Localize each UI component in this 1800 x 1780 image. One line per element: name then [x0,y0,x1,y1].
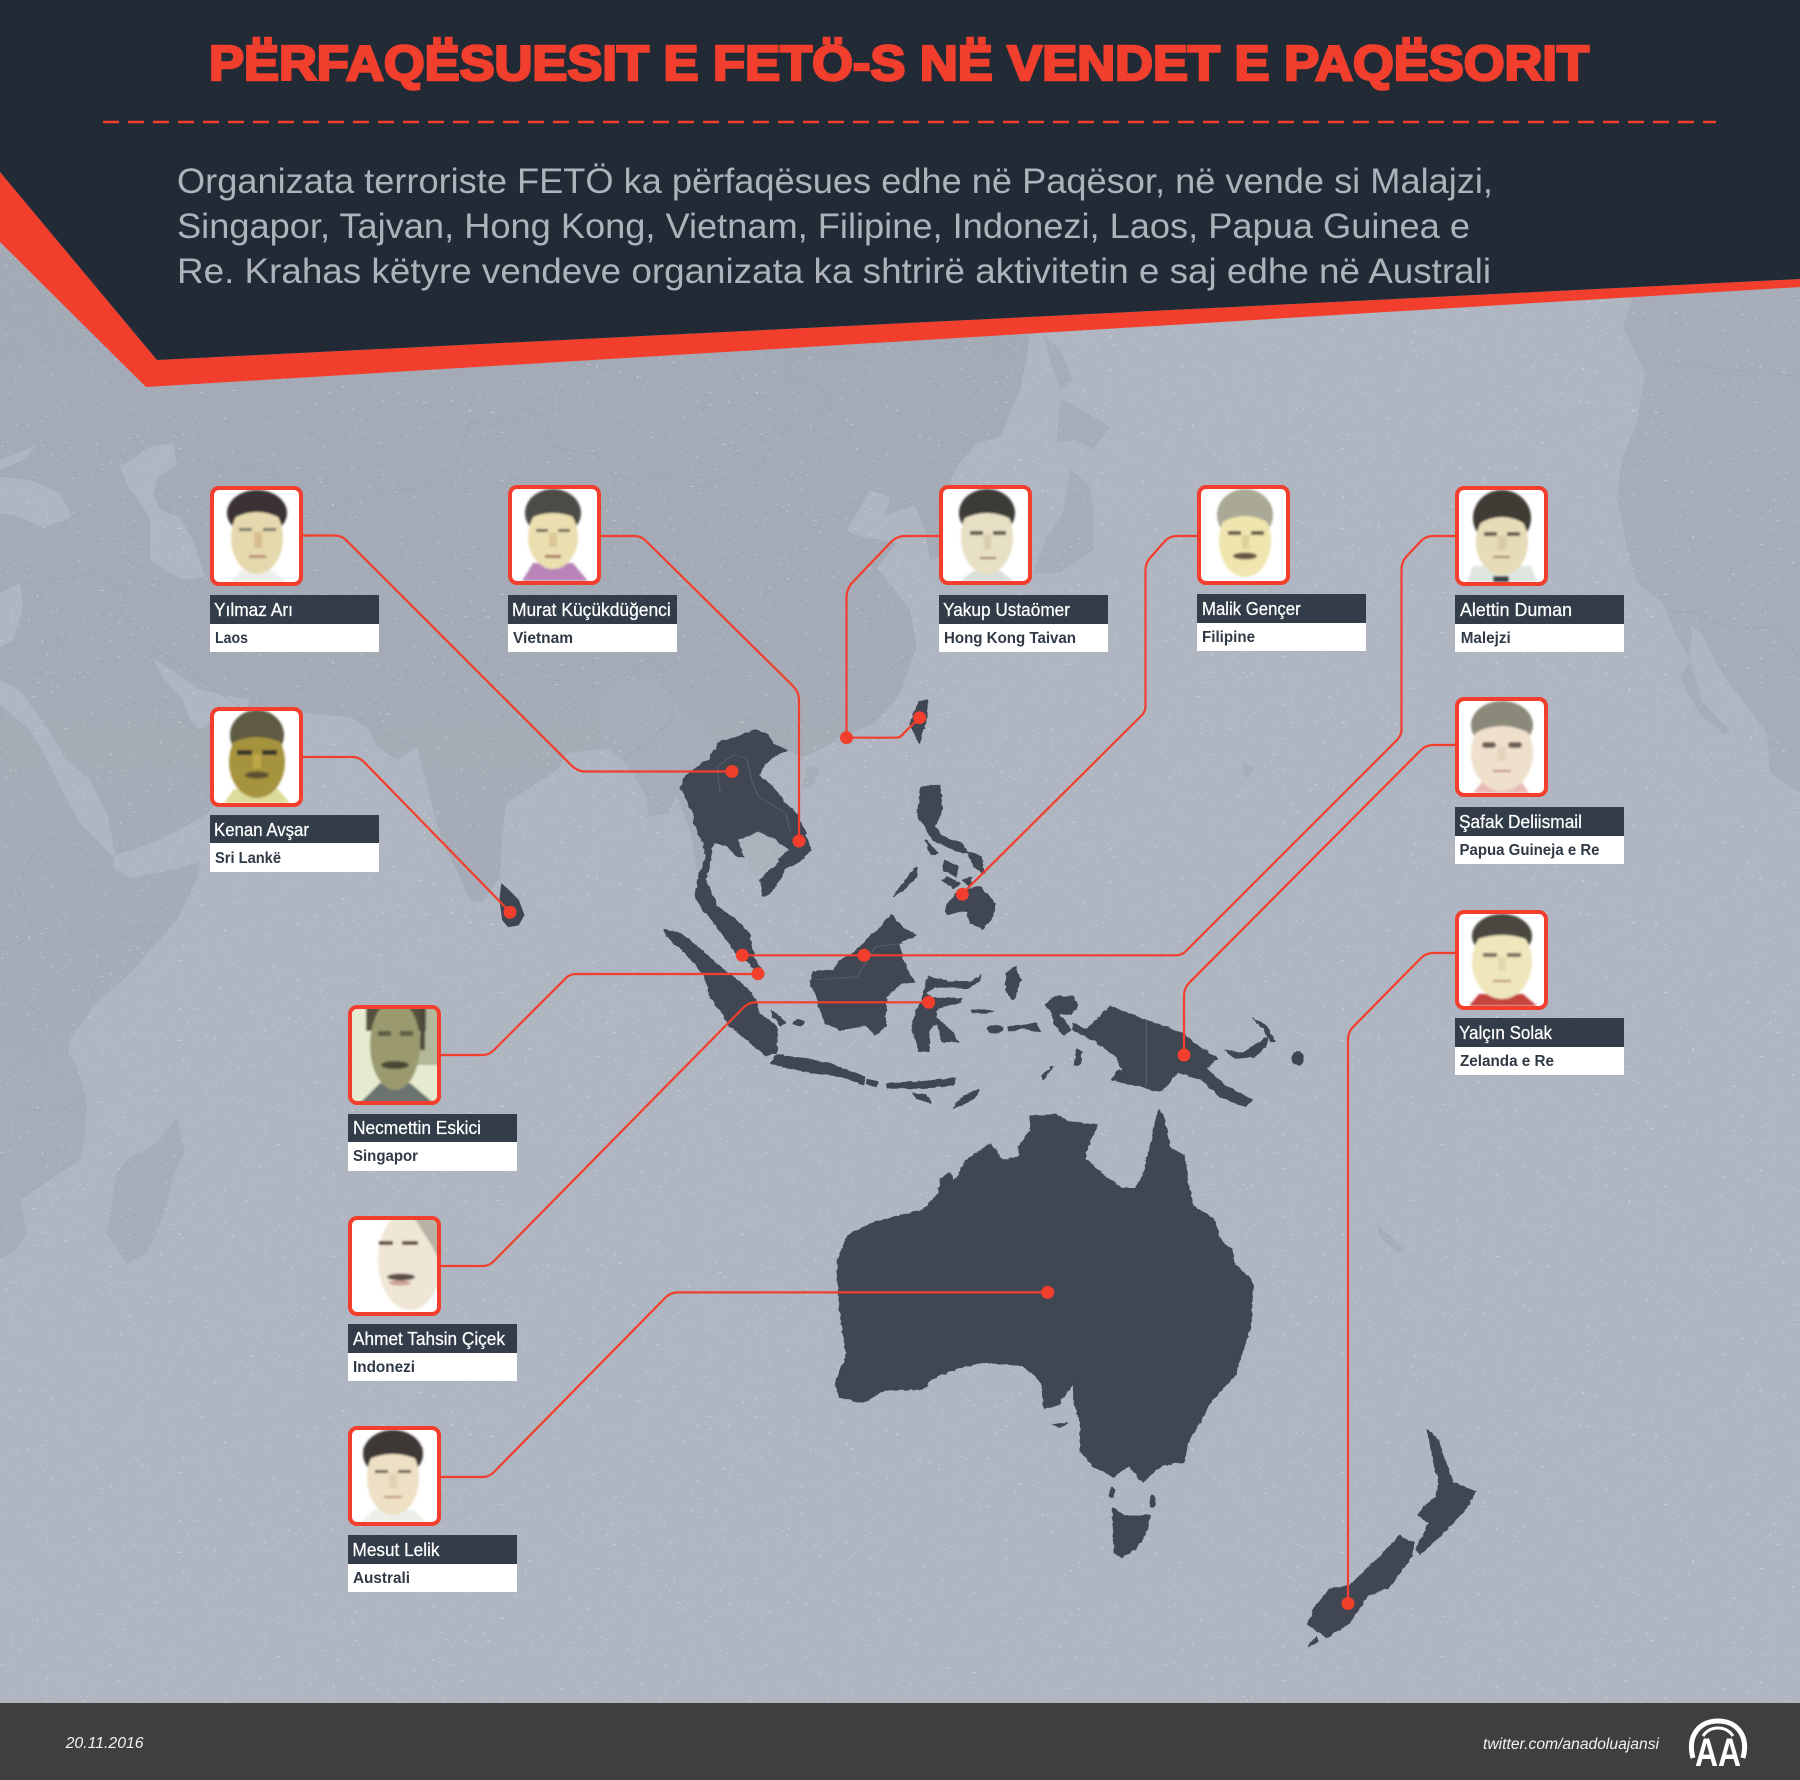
logo: Anadolu Agency: AA [1695,1731,1741,1775]
New Zealand South Island [1308,1536,1414,1638]
background land: Eurasia and Africa [0,230,1040,1260]
background borders [0,353,1800,1110]
portrait [350,1210,442,1314]
name bar: Alettin Duman [1460,599,1572,620]
Philippines [894,785,995,928]
portrait [212,488,301,584]
card: Necmettin Eskici [348,1000,517,1171]
dashed divider [103,121,1716,123]
background land: North America [1617,260,1800,793]
country bar [1455,624,1624,652]
name bar: Mesut Lelik [352,1539,440,1560]
logo: Anadolu Agency [1691,1721,1745,1775]
country bar [210,843,379,872]
country bar: Indonezi [353,1359,415,1376]
card: Yılmaz Arı [210,488,379,652]
name bar: Yakup Ustaömer [943,599,1070,620]
highlighted countries: South East Asia [665,700,1303,1108]
name bar: Yalçın Solak [1459,1022,1553,1043]
name bar: Murat Küçükdüğenci [512,599,671,620]
country bar [939,624,1108,652]
portrait [350,1428,439,1524]
country bar: Sri Lankë [215,850,281,867]
portrait [348,1000,441,1105]
connector: New Zealand [1342,953,1455,1610]
country bar [508,624,677,652]
portrait [510,487,599,583]
background land: Japan and Sakhalin [1033,333,1110,573]
Borneo [810,915,917,1035]
portrait [941,487,1030,583]
name bar [508,595,677,624]
country bar: Filipine [1202,629,1255,646]
country bar: Hong Kong Taivan [944,630,1076,647]
name bar [210,595,379,624]
card: Yakup Ustaömer [939,487,1108,652]
Taiwan [910,700,927,743]
title: PËRFAQËSUESIT E FETÖ-S NË VENDET E PAQËSORIT [209,37,1589,91]
country bar [1455,1047,1624,1075]
connector: Indonesia [441,996,935,1266]
connector: Sri Lanka [303,757,516,919]
Sulawesi [912,975,981,1052]
country bar: Australi [353,1570,410,1587]
New Guinea [1045,997,1303,1107]
portrait [1457,488,1546,584]
Sumatra [665,930,777,1055]
name bar: Malik Gençer [1202,598,1301,619]
country bar: Malejzi [1461,630,1511,647]
card: Kenan Avşar [210,709,379,872]
highlighted countries: Australia and New Zealand [835,1110,1476,1646]
footer bar [0,1703,1800,1780]
card: Mesut Lelik [348,1428,517,1592]
highlighted countries: Sri Lanka [500,884,524,927]
red band [0,172,1800,387]
Maluku islands [772,967,1081,1065]
sea of Gulf of California [1690,625,1737,702]
connector: Malaysia [736,536,1455,962]
card: Ahmet Tahsin Çiçek [348,1210,517,1381]
country bar [348,1353,517,1381]
name bar: Ahmet Tahsin Çiçek [353,1328,506,1349]
intro text [177,162,1493,291]
Australia [835,1110,1253,1482]
name bar [210,815,379,843]
Tasmania [1113,1508,1150,1557]
name bar [939,595,1108,624]
name bar [1455,595,1624,624]
connectors with location dots [303,536,1455,1610]
dark header shape [0,0,1800,360]
portrait [1457,912,1546,1008]
name bar: Kenan Avşar [214,819,309,840]
card: Murat Küçükdüğenci [508,487,677,652]
country bar: Vietnam [513,630,573,647]
inland seas [0,443,250,857]
background land: New Caledonia [1377,1223,1404,1253]
intro text: Re. Krahas këtyre vendeve organizata ka shtrirë aktivitetin e saj edhe në Australi [177,252,1491,291]
New Zealand Stewart Island [1308,1637,1318,1646]
country bar [1197,623,1366,651]
twitter handle: twitter.com/anadoluajansi [1483,1736,1660,1753]
portrait [1457,699,1546,795]
name bar: Şafak Deliismail [1459,811,1582,832]
name bar [348,1114,517,1142]
Java and Lesser Sunda [771,1055,1052,1108]
New Zealand North Island [1416,1430,1476,1554]
connector: Papua New Guinea [1178,745,1455,1062]
name bar [1455,1018,1624,1047]
name bar [348,1535,517,1564]
connector: Philippines [956,536,1197,901]
background land: Madagascar [107,1117,185,1263]
small islands [1052,1423,1155,1507]
portrait [1199,487,1288,583]
name bar [1455,807,1624,836]
country bar [210,624,379,652]
intro text: Organizata terroriste FETÖ ka përfaqësues edhe në Paqësor, në vende si Malajzi, [177,162,1493,201]
intro text: Singapor, Tajvan, Hong Kong, Vietnam, Filipine, Indonezi, Laos, Papua Guinea e [177,207,1470,246]
card: Malik Gençer [1197,487,1366,651]
country bar: Singapor [353,1148,418,1165]
name bar [1197,594,1366,623]
header panel [0,0,1800,387]
connector: Vietnam [600,536,806,848]
card: Yalçın Solak [1455,912,1624,1075]
card: Şafak Deliismail [1455,699,1624,864]
connector: Singapore [441,967,764,1055]
portrait [212,709,301,805]
connector: Australia [441,1286,1054,1477]
card: Alettin Duman [1455,488,1624,652]
country bar: Zelanda e Re [1460,1053,1554,1070]
country bar: Laos [215,630,248,647]
name bar: Yılmaz Arı [214,599,293,620]
background land: Myanmar, Cambodia, Hainan [600,680,1254,880]
country bar [348,1564,517,1592]
name bar [348,1324,517,1353]
Indochina and Malay peninsula [680,730,810,970]
date: 20.11.2016 [65,1735,144,1752]
connector: Laos [303,536,738,778]
country bar: Papua Guineja e Re [1460,842,1600,859]
country bar [348,1142,517,1171]
name bar: Necmettin Eskici [353,1117,481,1138]
connector: Hong Kong and Taiwan [840,536,939,744]
country bar [1455,836,1624,864]
internal country borders [717,755,1146,1087]
